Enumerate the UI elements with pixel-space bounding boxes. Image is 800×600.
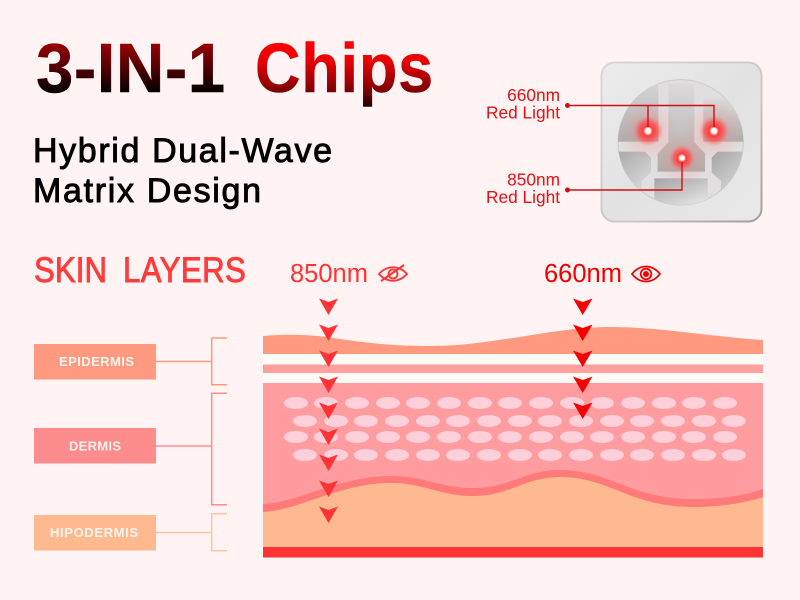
heading: skin layers: LAYERS (123, 251, 246, 290)
cells (284, 397, 746, 461)
callout: 850nm: Red Light (486, 187, 560, 207)
layer labels (34, 338, 227, 551)
LED glows (633, 116, 663, 146)
heading: skin layers (34, 251, 246, 290)
arrows: 660nm penetration (573, 298, 592, 419)
subtitle (33, 132, 332, 210)
label: epidermis: EPIDERMIS (59, 354, 134, 369)
wave: dermis boundary (263, 470, 763, 520)
chip diagram (602, 62, 762, 222)
callout: 660nm (486, 85, 714, 127)
title (36, 29, 433, 108)
icon: eye (632, 266, 660, 282)
layer: bottom bar (263, 547, 763, 558)
LED halos (618, 101, 678, 161)
callout: 850nm: 850nm (507, 170, 560, 190)
label: 850nm: 850nm (290, 260, 368, 288)
skin cross-section (263, 327, 763, 558)
subtitle: Hybrid Dual-Wave (33, 132, 332, 170)
label: hipodermis: HIPODERMIS (50, 525, 138, 540)
callout: 660nm: 660nm (507, 85, 560, 105)
heading: skin layers: SKIN (34, 251, 107, 290)
label: dermis: DERMIS (69, 438, 121, 454)
bracket: hipodermis (156, 514, 227, 551)
label: 660nm: 660nm (544, 260, 622, 288)
layer: hypodermis (263, 477, 763, 547)
label: dermis (34, 428, 156, 464)
callout: 660nm: Red Light (486, 102, 560, 122)
title: Chips (255, 30, 433, 108)
subtitle: Matrix Design (33, 172, 261, 210)
layer: gap band (263, 354, 763, 364)
layer: epidermis surface (263, 327, 763, 354)
icon: crossed-out eye (379, 265, 407, 281)
bracket: dermis (156, 393, 227, 505)
layer: thin band (263, 364, 763, 373)
callout: 850nm (486, 162, 682, 207)
label: hipodermis (34, 515, 156, 550)
layer: dermis (263, 383, 763, 518)
bracket: epidermis (156, 338, 227, 385)
layer: gap band (263, 373, 763, 383)
arrows: 850nm penetration (319, 298, 338, 523)
chip body (602, 62, 762, 222)
title: 3-IN-1 (36, 29, 225, 107)
chip circuit pads (618, 79, 744, 206)
label: epidermis (34, 344, 156, 380)
